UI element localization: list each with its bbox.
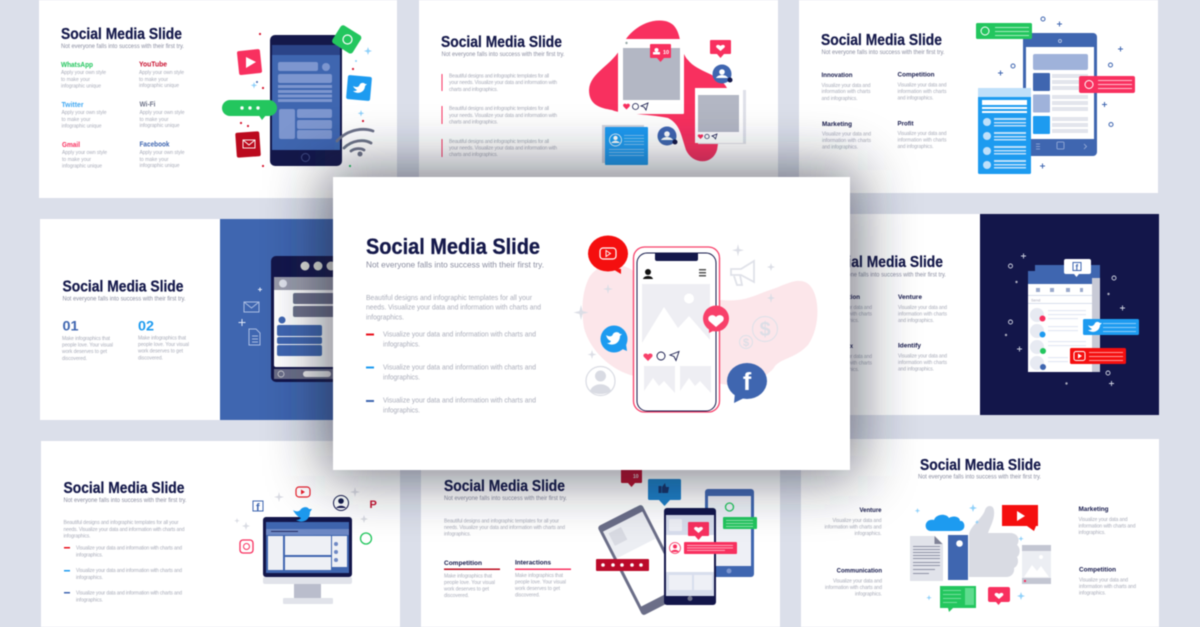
illustration: pale pink blob [582, 265, 817, 385]
item: Competition: Visualize your data and [1079, 578, 1128, 584]
column: Interactions [515, 560, 571, 598]
slide 3 title: Social Media Slide [821, 32, 942, 49]
item: Venture [824, 508, 882, 537]
central bullet 2: infographics. [383, 372, 420, 382]
item: Wi-Fi: to make your [140, 117, 169, 123]
stat: 01 [62, 318, 113, 362]
slide 6 intro text: needs. Visualize your data and information with charts and [64, 527, 185, 533]
illustration: desktop monitor with social icons [234, 487, 377, 604]
text: dollar glyphs [743, 319, 771, 349]
column: Competition [444, 561, 500, 599]
illustration: desktop monitor with social icons: P [370, 499, 377, 511]
icon: dollar coins [740, 316, 778, 348]
panel: slide 5 facebook feed [800, 214, 1159, 415]
item: Venture: infographics. [854, 531, 882, 537]
central intro text: Beautiful designs and infographic templates for all your [366, 293, 532, 302]
item: Innovation: Visualize your data and [822, 83, 871, 89]
slide 2 text block 2: your needs. Visualize your data and information with [449, 113, 557, 119]
icon: Twitter bubble [600, 326, 628, 352]
stat: 01: Make infographics that [62, 336, 111, 342]
item: Identify: Identify [898, 344, 922, 350]
item: Communication: Communication [837, 568, 882, 574]
item: Competition: Visualize your data and [898, 82, 947, 88]
item: WhatsApp: infographic unique [61, 84, 101, 90]
slide 7 title: Social Media Slide [444, 478, 565, 495]
slide 2 text block 1: charts and infographics. [449, 87, 498, 93]
central bullet 1: Visualize your data and information with charts and [383, 330, 536, 338]
item: Identify: Visualize your data and [898, 354, 947, 360]
item: Innovation: information with charts [823, 312, 872, 318]
item: Wi-Fi [140, 102, 185, 129]
panel: slide 3 tablet [799, 0, 1158, 193]
item: Marketing: Marketing [822, 122, 852, 128]
item: Complex: and infographics. [823, 367, 859, 373]
column: Interactions: people love. Your visual [515, 580, 566, 586]
item: Gmail [62, 142, 107, 170]
central subtitle: Not everyone falls into success with their first try. [366, 260, 544, 270]
item: Competition: information with charts and [1079, 584, 1136, 590]
slide 6 bullet 2: Visualize your data and information with charts and [76, 568, 182, 574]
slide 6 intro text: infographics. [64, 534, 90, 540]
item: Competition: infographics. [1079, 590, 1106, 596]
panel: slide 7 phones [421, 468, 780, 627]
slide 6 bullet 3: Visualize your data and information with charts and [76, 590, 182, 596]
column: Interactions: work deserves to get [515, 586, 561, 592]
item: Twitter: infographic unique [62, 124, 102, 130]
stat: 02: people love. Your visual [138, 342, 189, 348]
item: Gmail: infographic unique [62, 164, 102, 170]
item: Competition: information with charts [898, 89, 947, 95]
slide 6 subtitle: Not everyone falls into success with their first try. [64, 498, 187, 504]
central bullet 3: infographics. [383, 406, 420, 414]
item: Innovation: Visualize your data and [823, 305, 872, 311]
slide 4 title: Social Media Slide [62, 278, 184, 296]
item: Marketing: infographics. [1078, 530, 1106, 536]
slide 6 bullet 3 [64, 590, 182, 604]
item: Marketing: Visualize your data and [822, 132, 871, 138]
item: Marketing: information with charts [822, 138, 872, 144]
central bullet 3 [366, 396, 536, 414]
item: Venture: and infographics. [898, 318, 934, 324]
slide 1 subtitle: Not everyone falls into success with their first try. [61, 44, 184, 50]
stat: 01: people love. Your visual [62, 342, 113, 348]
slide 2 text block 1: Beautiful designs and infographic templates for all [449, 74, 549, 80]
icon: YouTube bubble [588, 236, 628, 274]
slide 6 intro text [64, 520, 185, 540]
item: Marketing [822, 122, 872, 150]
column: Interactions: discovered. [515, 592, 540, 598]
slide 2 text block 3: Beautiful designs and infographic templates for all [449, 139, 549, 145]
item: YouTube [139, 62, 184, 89]
item: Twitter: Apply your own style [62, 110, 107, 116]
item: WhatsApp: Apply your own style [61, 70, 106, 76]
item: Facebook: Apply your own style [140, 150, 185, 156]
slide 2 text block 2: Beautiful designs and infographic templates for all [449, 106, 549, 112]
slide 2 text block 1 [442, 74, 557, 93]
slide 6 bullet 1: infographics. [76, 552, 103, 558]
stat: 02 [138, 318, 189, 362]
slide 2 subtitle: Not everyone falls into success with their first try. [442, 52, 565, 58]
illustration: desktop monitor with social icons: f [256, 502, 260, 514]
panel: central slide [333, 177, 850, 470]
slide 2 text block 3: charts and infographics. [449, 152, 498, 158]
item: Venture: Venture [859, 508, 882, 514]
item: Communication: infographics. [855, 592, 882, 598]
item: Twitter [62, 102, 107, 130]
item: Facebook: to make your [140, 157, 169, 163]
item: Identify: and infographics. [898, 366, 934, 372]
illustration: chat phone [270, 256, 334, 382]
item: Marketing: and infographics. [822, 144, 858, 150]
item: Innovation [822, 73, 871, 102]
item: Profit: and infographics. [898, 144, 934, 150]
illustration: phone with app icons [222, 24, 373, 167]
central title: Social Media Slide [366, 234, 540, 259]
slide 2 text block 2: charts and infographics. [449, 120, 498, 126]
icon: Facebook bubble [727, 363, 767, 403]
item: YouTube: YouTube [139, 62, 167, 68]
item: Profit [898, 122, 947, 150]
icon: megaphone [731, 261, 754, 285]
item: WhatsApp [61, 62, 106, 90]
item: Marketing: Visualize your data and [1078, 517, 1128, 523]
item: Venture: Visualize your data and [832, 518, 882, 524]
slide 5 title: Social Media Slide [822, 254, 943, 271]
item: Wi-Fi: infographic unique [140, 123, 180, 129]
item: Innovation: information with charts [822, 89, 871, 95]
stat: 02: work deserves to get [138, 348, 184, 354]
item: Venture: information with charts and [824, 524, 882, 530]
central bullet 1: infographics. [383, 340, 420, 348]
panel: slide 1 apps list [39, 0, 397, 198]
stat: 02: discovered. [138, 356, 163, 362]
panel: slide 2 posts [419, 0, 778, 178]
item: Facebook: infographic unique [140, 163, 180, 169]
item: WhatsApp: to make your [61, 77, 90, 83]
central bullet 2: Visualize your data and information with charts and [383, 362, 536, 372]
item: Communication [825, 568, 882, 598]
central intro text: needs. Visualize your data and information with charts and [366, 302, 541, 312]
item: Communication: Visualize your data and [833, 578, 882, 584]
item: Gmail: Gmail [62, 142, 80, 149]
illustration: feed with social badges: f [1076, 263, 1078, 272]
item: Facebook [140, 142, 185, 169]
item: Wi-Fi: Apply your own style [140, 110, 185, 116]
slide 2 text block 3 [442, 139, 557, 158]
item: Innovation: and infographics. [822, 96, 858, 102]
item: Profit: Profit [898, 122, 914, 128]
slide 1 title: Social Media Slide [61, 26, 182, 43]
slide 6 intro text: Beautiful designs and infographic templates for all your [64, 520, 179, 526]
slide 5 subtitle: Not everyone falls into success with their first try. [823, 272, 946, 278]
item: Marketing: information with charts and [1078, 524, 1136, 530]
item: YouTube: Apply your own style [139, 70, 184, 76]
slide 8 subtitle: Not everyone falls into success with their first try. [918, 474, 1041, 480]
icon: heart bubble [703, 306, 729, 333]
slide 2 text block 2 [442, 106, 557, 126]
shadow of the central slide [325, 170, 858, 476]
central intro text: infographics. [366, 312, 404, 322]
slide 7 intro text: infographics. [444, 532, 471, 538]
item: Venture: Visualize your data and [898, 305, 947, 311]
item: Innovation: Innovation [822, 73, 853, 79]
column: Competition: Make infographics that [444, 574, 493, 580]
decorative sparkles [574, 244, 775, 359]
item: Twitter: Twitter [62, 102, 84, 109]
item: WhatsApp: WhatsApp [61, 62, 93, 69]
illustration: three phones with badges [596, 469, 757, 616]
central intro text [366, 293, 541, 322]
slide 7 intro text [444, 518, 565, 538]
item: Marketing: Marketing [1078, 507, 1109, 513]
item: Identify: information with charts [898, 360, 948, 366]
slide 2 text block 3: your needs. Visualize your data and information with [449, 146, 557, 152]
item: Complex: information with charts [823, 360, 872, 366]
column: Competition: people love. Your visual [444, 580, 495, 586]
icon: user avatar [586, 366, 615, 396]
slide 3 subtitle: Not everyone falls into success with their first try. [822, 50, 945, 56]
item: Venture [898, 295, 948, 324]
item: Twitter: to make your [62, 117, 91, 123]
item: Innovation: Innovation [829, 295, 860, 301]
illustration: phone [634, 247, 720, 412]
item: Gmail: to make your [62, 157, 91, 163]
item: Complex [823, 344, 872, 373]
text: dollar glyphs: $ [743, 337, 749, 349]
item: Competition: Competition [1079, 568, 1116, 574]
column: Competition: discovered. [444, 593, 469, 599]
item: Competition: Competition [898, 72, 935, 78]
item: Competition [898, 72, 947, 102]
column: Competition: work deserves to get [444, 586, 490, 592]
item: Innovation: and infographics. [823, 318, 859, 324]
illustration: thumbs up with media [910, 504, 1051, 612]
slide 6 bullet 2: infographics. [76, 575, 103, 581]
item: Communication: information with charts and [825, 585, 882, 591]
slide 4 subtitle: Not everyone falls into success with their first try. [62, 296, 186, 302]
item: Innovation [823, 295, 872, 324]
item: Competition [1079, 568, 1136, 596]
stat: 01: work deserves to get [62, 349, 108, 355]
item: Profit: information with charts [898, 138, 947, 144]
item: Profit: Visualize your data and [898, 131, 947, 137]
icons: envelope, document, sparkles [238, 288, 262, 345]
item: Complex: Visualize your data and [823, 354, 872, 360]
item: Gmail: Apply your own style [62, 150, 107, 156]
slide 8 title: Social Media Slide [920, 457, 1041, 474]
slide 6 bullet 1: Visualize your data and information with charts and [76, 546, 182, 552]
illustration: pink blob with posts [589, 20, 746, 165]
item: YouTube: infographic unique [139, 83, 179, 89]
stat: 02: Make infographics that [138, 336, 187, 342]
panel: slide 8 thumbs up [801, 439, 1159, 627]
slide 2 text block 1: your needs. Visualize your data and information with [449, 80, 557, 86]
central bullet 3: Visualize your data and information with charts and [383, 396, 536, 404]
text: dollar glyphs: $ [759, 319, 771, 341]
item: Competition: and infographics. [898, 96, 934, 102]
illustration: feed with social badges [1005, 254, 1139, 386]
slide 2 title: Social Media Slide [441, 34, 562, 51]
panel: slide 4 chat [40, 219, 351, 420]
item: Facebook: Facebook [140, 142, 170, 148]
slide 6 bullet 2 [64, 568, 182, 581]
icon: Facebook bubble: f [743, 368, 752, 396]
stat: 02: 02 [138, 318, 154, 334]
panel: slide 6 desktop [41, 441, 400, 627]
slide 7 subtitle: Not everyone falls into success with their first try. [444, 496, 567, 502]
item: Identify [898, 344, 948, 372]
illustration: tablet with cards [976, 17, 1135, 174]
illustration: pink blob with posts: 10 [663, 50, 669, 56]
column: Interactions: Make infographics that [515, 573, 564, 579]
column: Competition: Competition [444, 561, 482, 567]
central bullet 2 [366, 362, 536, 382]
slide 6 bullet 3: infographics. [76, 598, 103, 604]
slide 7 intro text: Beautiful designs and infographic templates for all your [444, 518, 559, 524]
item: Venture: information with charts [898, 312, 948, 318]
stat: 01: 01 [62, 318, 79, 334]
item: Marketing [1078, 507, 1136, 536]
central bullet 1 [366, 330, 536, 348]
item: Venture: Venture [898, 295, 923, 301]
slide 6 title: Social Media Slide [64, 480, 185, 497]
slide 7 intro text: needs. Visualize your data and information with charts and [444, 525, 565, 531]
item: Wi-Fi: Wi-Fi [140, 102, 156, 108]
column: Interactions: Interactions [515, 560, 552, 566]
illustration: feed with social badges: Send [1031, 298, 1040, 302]
item: Complex: Complex [829, 344, 854, 350]
stat: 01: discovered. [62, 356, 87, 362]
illustration: three phones with badges: 10 [633, 474, 639, 480]
slide 6 bullet 1 [64, 546, 182, 558]
item: YouTube: to make your [139, 77, 168, 83]
